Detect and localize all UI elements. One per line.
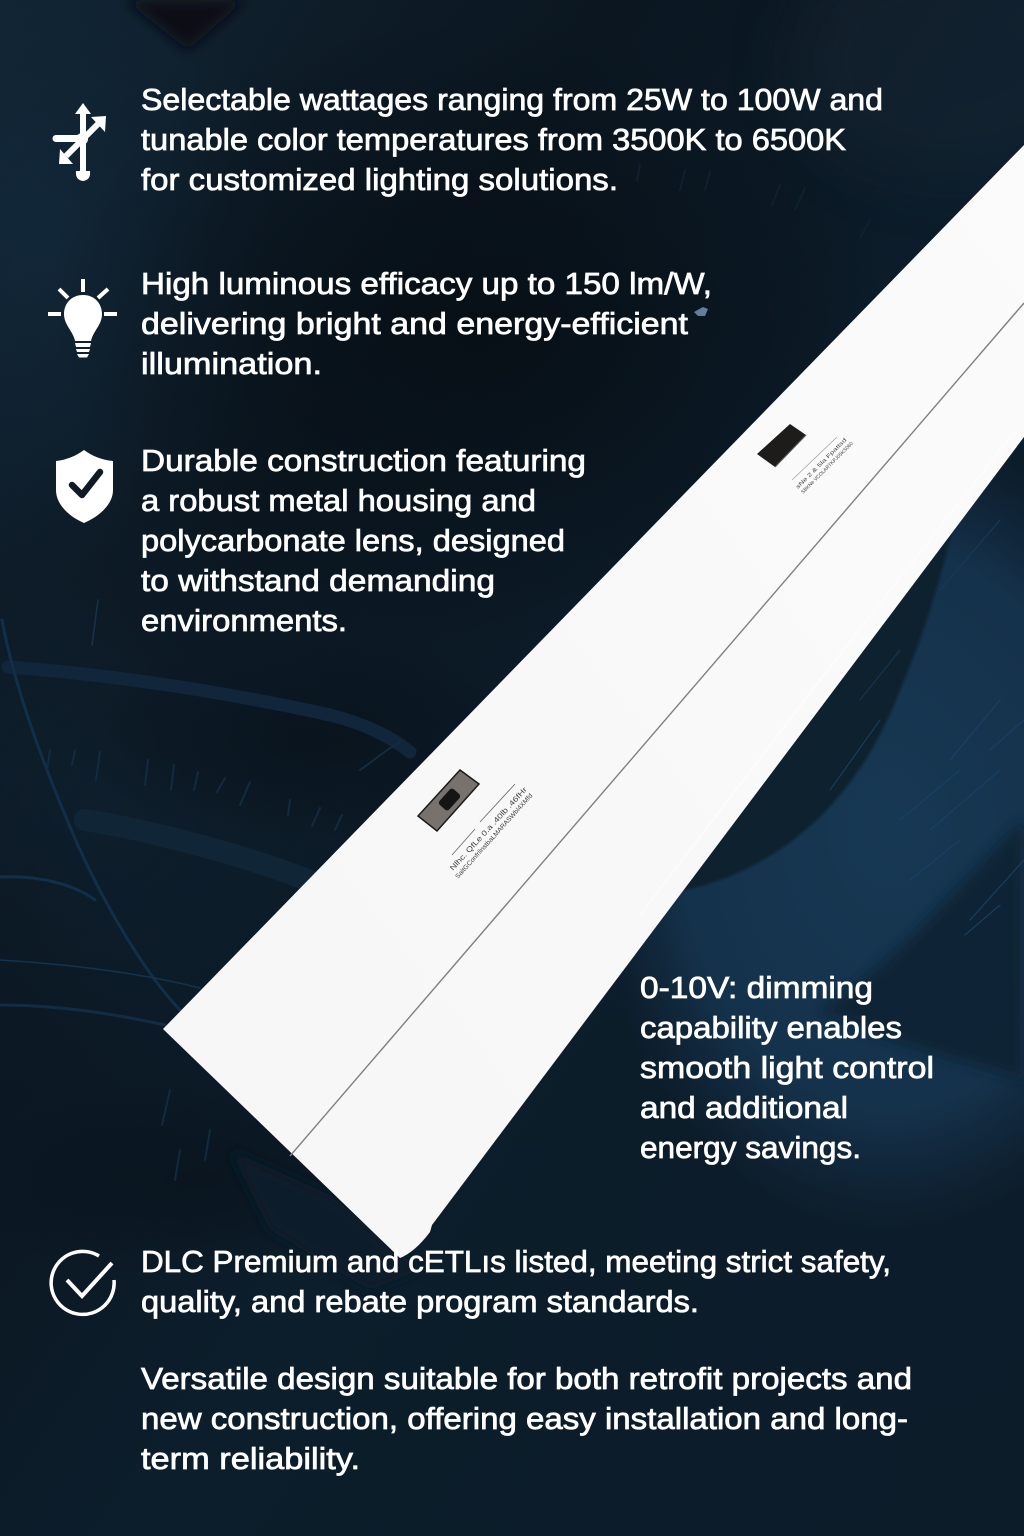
text: luminous efficacy: delivering bright and energy-efficient <box>141 306 688 341</box>
text: 0-10V dimming: smooth light control <box>640 1050 934 1085</box>
text: 0-10V dimming <box>640 970 934 1165</box>
icon: shield with check <box>56 450 113 523</box>
lower printed label: Nlhc. QfLe 0.a .40lb .46fHr <box>448 785 529 872</box>
text: selectable wattages: Selectable wattages ranging from 25W to 100W and <box>141 82 883 117</box>
text: DLC and cETL listing: quality, and rebate program standards. <box>141 1284 699 1319</box>
text: durable construction: Durable construction featuring <box>141 443 586 478</box>
linear LED fixture <box>163 145 1024 1258</box>
text: DLC and cETL listing: DLC Premium and cETLıs listed, meeting strict safety, <box>141 1244 891 1279</box>
text: 0-10V dimming: energy savings. <box>640 1130 861 1165</box>
text: durable construction <box>141 443 586 638</box>
text: versatile design: new construction, offering easy installation and long- <box>141 1401 908 1436</box>
text: durable construction: to withstand demanding <box>141 563 495 598</box>
text: selectable wattages: for customized lighting solutions. <box>141 162 618 197</box>
text: durable construction: a robust metal housing and <box>141 483 536 518</box>
icon: circle check <box>51 1251 114 1314</box>
text: durable construction: polycarbonate lens, designed <box>141 523 565 558</box>
text: DLC and cETL listing <box>141 1244 891 1319</box>
text: versatile design: Versatile design suitable for both retrofit projects and <box>141 1361 912 1396</box>
upper printed label: sNe 2 & 5la Fpattsd <box>795 437 848 490</box>
text: versatile design: term reliability. <box>141 1441 360 1476</box>
text: versatile design <box>141 1361 912 1476</box>
text: luminous efficacy <box>141 266 712 381</box>
text: luminous efficacy: High luminous efficacy up to 150 lm/W, <box>141 266 712 301</box>
lower printed label: SaltGConfrllnstbaLMARASWbl4XMfd <box>454 792 535 880</box>
text: luminous efficacy: illumination. <box>141 346 322 381</box>
text: 0-10V dimming: and additional <box>640 1090 848 1125</box>
icon: light bulb <box>48 279 117 358</box>
lower sensor module <box>418 770 479 831</box>
fixture centre seam <box>290 303 1024 1156</box>
icon: adjustable arrows <box>56 103 106 181</box>
upper sensor module <box>757 424 806 467</box>
text: durable construction: environments. <box>141 603 347 638</box>
text: selectable wattages: tunable color temperatures from 3500K to 6500K <box>141 122 846 157</box>
text: 0-10V dimming: capability enables <box>640 1010 902 1045</box>
upper printed label: SBKNe VCOLARTKPJ05KS060 <box>800 441 855 495</box>
text: 0-10V dimming: 0-10V: dimming <box>640 970 873 1005</box>
text: selectable wattages <box>141 82 883 197</box>
